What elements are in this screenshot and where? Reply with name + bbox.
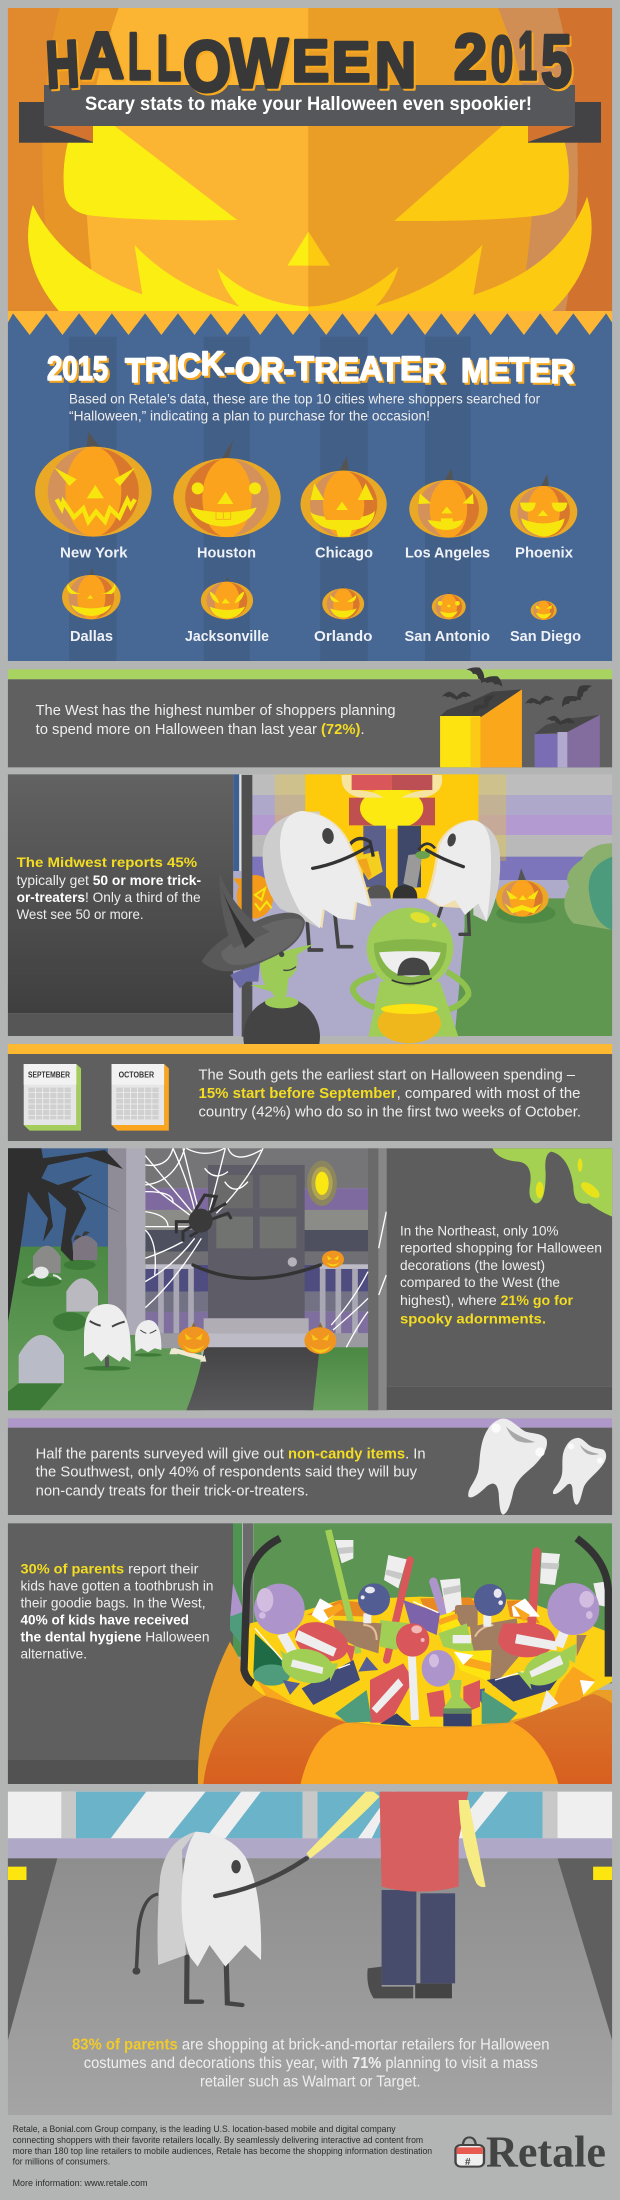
blue background with zigzag edge <box>8 313 612 661</box>
text: non-candy stat: the Southwest, only 40% of respondents said they will buy <box>36 1464 418 1481</box>
pumpkin: San Antonio <box>432 591 466 619</box>
panel: store front <box>8 1792 612 2115</box>
text: West stat: to spend more on Halloween than last year (72%). <box>36 721 365 738</box>
city labels: New York <box>60 544 128 561</box>
city labels: San Antonio <box>404 628 490 645</box>
text: Midwest stat: The Midwest reports 45% <box>17 854 198 870</box>
pumpkin: Orlando <box>322 585 364 619</box>
pumpkin face artwork <box>8 8 612 338</box>
text: Northeast stat: highest), where 21% go for <box>400 1292 574 1308</box>
text: South stat <box>198 1066 581 1121</box>
panel: Midwest trick-or-treaters <box>8 774 612 1076</box>
pumpkin: New York <box>35 432 152 537</box>
text: toothbrush stat: their goodie bags. In the West, <box>20 1594 206 1610</box>
text: South stat: The South gets the earliest start on Halloween spending – <box>198 1066 576 1083</box>
label: September: SEPTEMBER <box>28 1070 70 1080</box>
city labels: Dallas <box>70 628 113 645</box>
text side panel with slime <box>387 1148 612 1410</box>
tombstones <box>8 1236 98 1410</box>
city labels: Houston <box>197 544 256 561</box>
city labels: Chicago <box>315 544 373 561</box>
title: Halloween 2015: L <box>128 19 151 93</box>
witch <box>202 873 320 1076</box>
pumpkins on porch <box>178 1251 344 1354</box>
green slime <box>492 1148 612 1217</box>
footer text: more than 180 top line retailers to mobile audiences, Retale has become the shopping information destination <box>13 2146 432 2157</box>
text: toothbrush stat: alternative. <box>20 1646 87 1662</box>
heading: 2015 trick-or-treater meter: TRICK-OR-TREATER <box>125 345 445 390</box>
bone <box>174 1350 201 1358</box>
bucket handle <box>244 1538 608 1683</box>
footer text: connecting shoppers with their favorite retailers locally. By seamlessly delivering interactive ad content from <box>13 2135 423 2146</box>
title: Halloween 2015: O <box>180 25 234 109</box>
adult at door <box>342 775 442 898</box>
text: South stat: country (42%) who do so in the first two weeks of October. <box>198 1104 581 1121</box>
title: Halloween 2015: H <box>44 26 81 102</box>
title: Halloween 2015: 1 <box>518 18 537 94</box>
text: non-candy stat: non-candy treats for their trick-or-treaters. <box>36 1482 309 1499</box>
toothbrushes <box>328 1530 605 1660</box>
icon: September calendar <box>24 1064 81 1131</box>
text: toothbrush stat: 40% of kids have received <box>20 1611 189 1627</box>
text: brick-and-mortar stat: retailer such as Walmart or Target. <box>200 2074 420 2091</box>
city labels: Los Angeles <box>405 544 490 561</box>
panel background with green bar and shopping bags <box>8 663 612 767</box>
heading: 2015 trick-or-treater meter <box>47 345 574 391</box>
title: Halloween 2015: A <box>80 18 124 92</box>
pumpkin: Phoenix <box>510 474 577 538</box>
haunted house scene <box>8 1148 388 1410</box>
text: Northeast stat: reported shopping for Halloween <box>400 1240 602 1256</box>
title: Halloween 2015: E <box>292 29 329 94</box>
text: Midwest stat: or-treaters! Only a third of the <box>17 889 201 905</box>
title: Halloween 2015: W <box>230 24 288 102</box>
city labels: Orlando <box>314 628 372 645</box>
text: toothbrush stat: the dental hygiene Halloween <box>20 1629 210 1645</box>
panel: Northeast decorations <box>8 1148 612 1410</box>
green monster <box>353 908 468 1043</box>
text: Midwest stat: typically get 50 or more trick- <box>17 872 201 888</box>
tree <box>8 1148 123 1322</box>
pumpkin: Houston <box>173 440 281 537</box>
text: brick-and-mortar stat: 83% of parents are shopping at brick-and-mortar retailers for Halloween <box>72 2036 550 2053</box>
text: West stat <box>36 702 396 738</box>
title: Halloween 2015: N <box>375 29 416 101</box>
title: Halloween 2015: E <box>332 30 370 93</box>
pumpkins: remaining eight cities <box>62 456 577 620</box>
title: Halloween 2015: 0 <box>491 23 513 95</box>
city labels: Phoenix <box>515 544 574 561</box>
text: Northeast stat: spooky adornments. <box>400 1310 546 1326</box>
heading: 2015 trick-or-treater meter: 2015 <box>47 350 108 388</box>
text: non-candy stat: Half the parents surveyed will give out non-candy items. In <box>36 1445 426 1462</box>
text: brick-and-mortar stat: costumes and decorations this year, with 71% planning to visit a mass <box>84 2055 538 2072</box>
title: Halloween 2015: L <box>157 22 181 94</box>
text: non-candy stat <box>36 1445 426 1499</box>
store scene <box>8 1792 612 2115</box>
city labels: San Diego <box>510 628 581 645</box>
footer text: Retale, a Bonial.com Group company, is the leading U.S. location-based mobile and digital company <box>13 2124 396 2135</box>
icon: teeth <box>468 1419 606 1515</box>
far-left items <box>230 1583 242 1640</box>
panel: South calendars <box>8 1044 612 1141</box>
text: toothbrush stat: kids have gotten a toothbrush in <box>20 1577 214 1593</box>
subtitle: Scary stats to make your Halloween even spookier! <box>85 94 532 115</box>
footer text: for millions of consumers. <box>13 2157 110 2168</box>
title: Halloween 2015: 5 <box>541 20 572 103</box>
panel background with purple bar <box>8 1418 612 1515</box>
title: Halloween 2015 <box>44 18 572 109</box>
wordmark: Retale <box>486 2128 606 2177</box>
skull <box>27 1267 62 1280</box>
text: Midwest stat: West see 50 or more. <box>17 906 144 922</box>
footer text <box>13 2124 432 2189</box>
city labels <box>60 544 581 645</box>
ghost <box>132 1832 306 2005</box>
text: South stat: 15% start before September, compared with most of the <box>198 1085 580 1102</box>
hash mark: # <box>465 2157 471 2168</box>
pumpkin: Dallas <box>62 567 121 619</box>
label: October: OCTOBER <box>119 1070 154 1080</box>
panel: trick-or-treater meter <box>8 313 612 661</box>
text: brick-and-mortar stat <box>72 2036 550 2091</box>
candy pile <box>253 1583 599 1726</box>
pumpkin: Chicago <box>301 456 387 537</box>
panel: West spending stat <box>8 663 612 767</box>
ghost right <box>426 820 500 934</box>
icon: shopping bag <box>456 2137 484 2167</box>
spider web <box>145 1148 386 1347</box>
footer text: More information: www.retale.com <box>13 2178 148 2189</box>
intro paragraph: Based on Retale’s data, these are the top 10 cities where shoppers searched for <box>69 390 540 406</box>
spider <box>176 1195 231 1242</box>
logo: Retale <box>456 2128 606 2177</box>
trick-or-treaters illustration <box>202 775 500 1076</box>
text: Northeast stat: In the Northeast, only 10% <box>400 1223 558 1239</box>
heading: 2015 trick-or-treater meter: METER <box>461 351 574 391</box>
city labels: Jacksonville <box>185 628 269 645</box>
title: Halloween 2015: 2 <box>454 21 487 93</box>
ghost left <box>263 811 372 950</box>
text: Midwest stat <box>17 854 201 922</box>
intro paragraph <box>69 390 540 423</box>
text: toothbrush stat: 30% of parents report their <box>20 1560 199 1576</box>
banner ribbon <box>19 85 601 143</box>
panel: header pumpkin <box>8 8 612 338</box>
text: Northeast stat: decorations (the lowest) <box>400 1257 545 1273</box>
intro paragraph: “Halloween,” indicating a plan to purchase for the occasion! <box>69 407 430 423</box>
pumpkin: San Diego <box>531 599 557 620</box>
icon: October calendar <box>112 1064 169 1131</box>
adult figure <box>306 1792 486 1998</box>
ghosts <box>84 1304 162 1371</box>
text: toothbrush stat <box>20 1560 214 1662</box>
text: Northeast stat: compared to the West (the <box>400 1274 560 1290</box>
pumpkin: Jacksonville <box>201 577 253 619</box>
left text background <box>8 1523 233 1784</box>
panel: non-candy items <box>8 1418 612 1515</box>
text: Northeast stat <box>400 1223 602 1326</box>
candy bucket illustration <box>198 1523 612 1784</box>
pumpkin: Los Angeles <box>409 468 488 538</box>
panel background with orange bar <box>8 1044 612 1141</box>
panel: toothbrushes in goodie bags <box>8 1523 612 1784</box>
text: West stat: The West has the highest number of shoppers planning <box>36 702 396 719</box>
porch backdrop <box>8 774 612 1036</box>
